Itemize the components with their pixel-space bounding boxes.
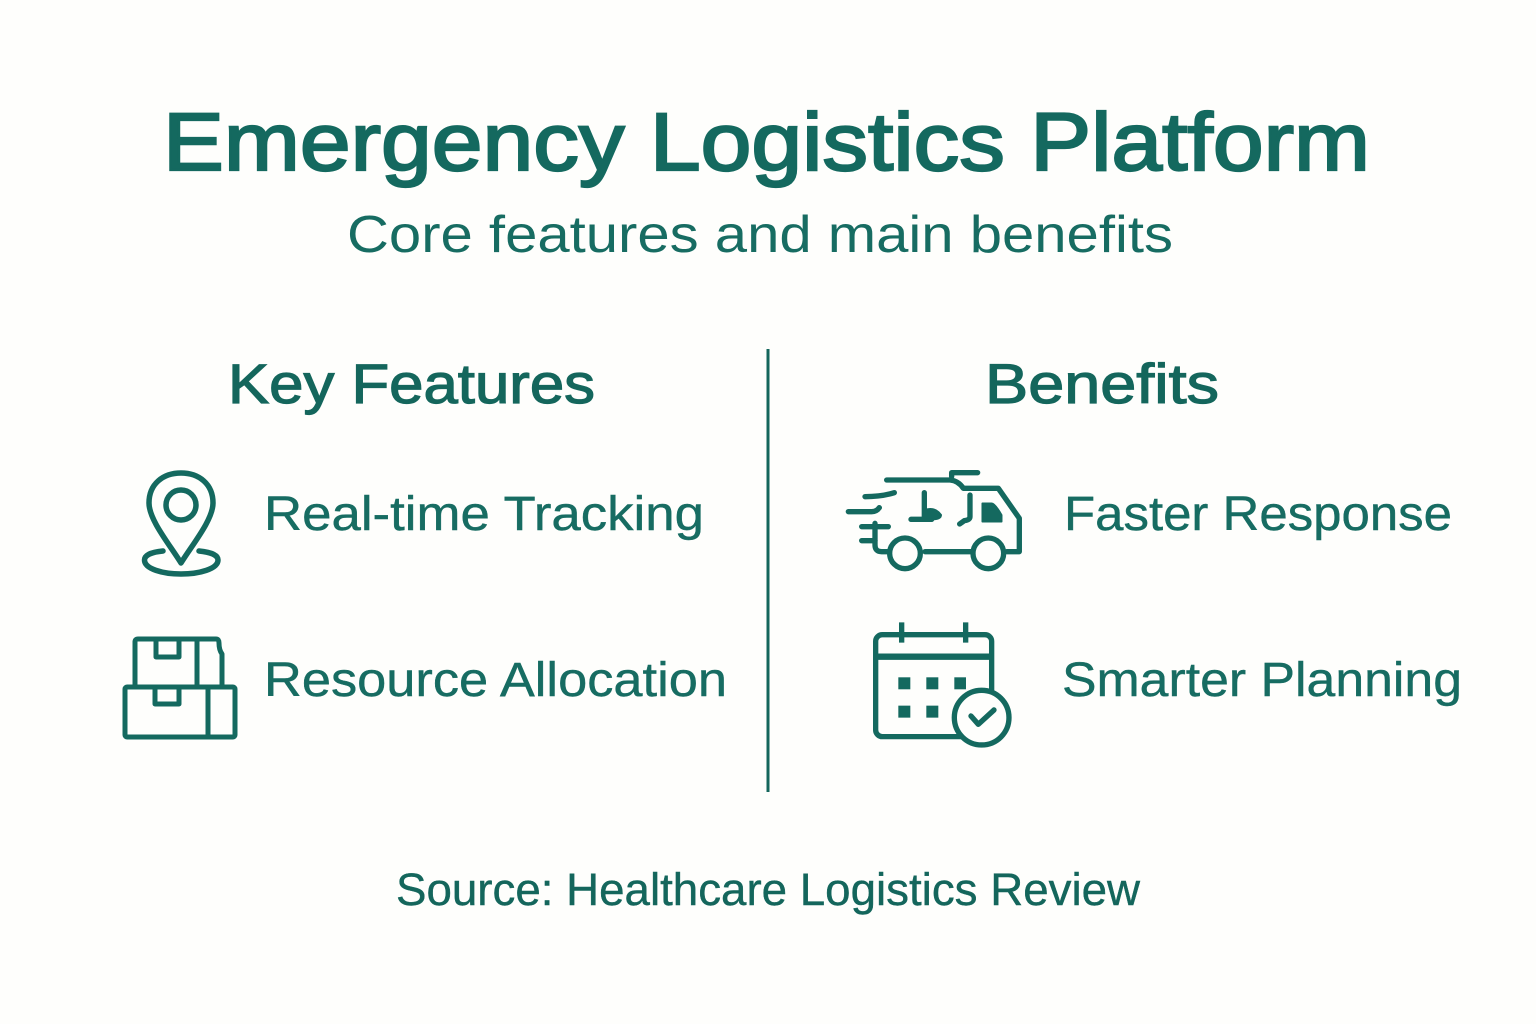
heading: key features: Key Features [228,352,595,415]
label: resource allocation: Resource Allocation [264,654,727,707]
subtitle: Core features and main benefits [347,206,1173,264]
icon: location pin [144,473,218,574]
divider [766,349,770,792]
title: Emergency Logistics Platform [163,97,1370,188]
source note: Source: Healthcare Logistics Review [396,864,1140,915]
icon: calendar with check [876,622,1009,745]
heading: benefits: Benefits [985,352,1219,415]
label: smarter planning: Smarter Planning [1062,654,1462,707]
icon: stacked boxes [125,639,235,737]
label: real-time tracking: Real-time Tracking [264,488,704,541]
label: faster response: Faster Response [1064,488,1452,541]
icon: speeding van [848,473,1019,569]
